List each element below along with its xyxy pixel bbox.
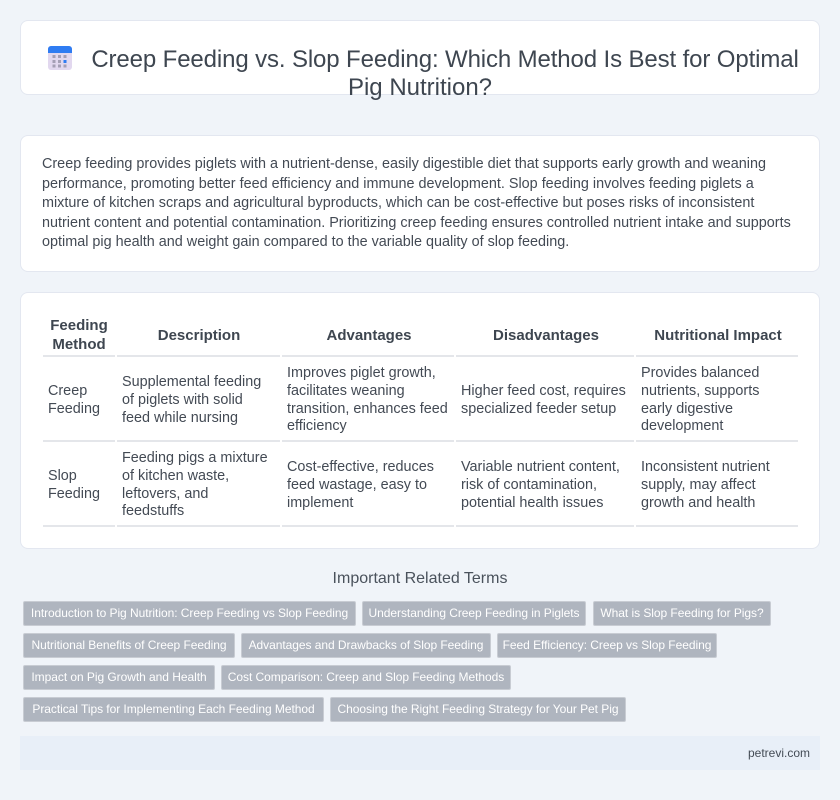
related term tags: Cost Comparison: Creep and Slop Feeding Methods — [228, 670, 504, 684]
text block: introduction: mixture of kitchen scraps and agricultural byproducts, which can be cost-effective but poses risks of inconsistent — [42, 195, 754, 211]
panel: comparison table — [20, 292, 820, 549]
related term tags: Choosing the Right Feeding Strategy for Your Pet Pig — [338, 702, 618, 716]
table row: slop feeding: leftovers, and — [122, 486, 208, 502]
table header row — [50, 317, 782, 353]
table row: creep feeding: Creep — [48, 383, 87, 399]
text block: introduction: optimal pig health and weight gain compared to the variable quality of slop feeding. — [42, 234, 569, 250]
table row: slop feeding: Variable nutrient content, — [461, 459, 620, 475]
text block: introduction — [42, 156, 791, 250]
table row: creep feeding: Higher feed cost, requires — [461, 383, 626, 399]
table row: creep feeding: Feeding — [48, 401, 100, 417]
table header row: Description — [158, 327, 240, 344]
related term tags — [23, 601, 771, 722]
related term tags: What is Slop Feeding for Pigs? — [600, 606, 764, 620]
table row: slop feeding: Inconsistent nutrient — [641, 459, 770, 475]
table row: slop feeding: Slop — [48, 468, 77, 484]
related term tags: Feed Efficiency: Creep vs Slop Feeding — [503, 638, 711, 652]
table row: slop feeding: feedstuffs — [122, 503, 184, 519]
related term tags: Understanding Creep Feeding in Piglets — [369, 606, 579, 620]
table row: slop feeding: potential health issues — [461, 495, 603, 511]
text block: introduction: Creep feeding provides piglets with a nutrient-dense, easily digestible diet that supports early growth and weaning — [42, 156, 766, 172]
related term tags: Nutritional Benefits of Creep Feeding — [32, 638, 226, 652]
table row: slop feeding: Feeding — [48, 486, 100, 502]
table row: creep feeding: early digestive — [641, 401, 733, 417]
table header row: Method — [52, 336, 106, 353]
table row: creep feeding: Provides balanced — [641, 365, 759, 381]
table row: slop feeding: risk of contamination, — [461, 477, 597, 493]
panel: introduction text — [20, 135, 820, 272]
table header row: Nutritional Impact — [654, 327, 782, 344]
footer bar — [20, 736, 820, 770]
table row: creep feeding: development — [641, 418, 723, 434]
related term tags: Advantages and Drawbacks of Slop Feeding — [249, 638, 483, 652]
title: Creep Feeding vs. Slop Feeding: Which Method Is Best for Optimal — [91, 46, 799, 73]
table row: creep feeding: transition, enhances feed — [287, 401, 448, 417]
table row: slop feeding: supply, may affect — [641, 477, 756, 493]
table row: creep feeding: of piglets with solid — [122, 392, 243, 408]
table header row: Disadvantages — [493, 327, 599, 344]
table row: creep feeding: Supplemental feeding — [122, 374, 261, 390]
table row: slop feeding — [48, 450, 770, 519]
text block: introduction: performance, promoting better feed efficiency and immune development. Slop feeding involves feeding piglets a — [42, 176, 754, 192]
title — [91, 46, 799, 101]
title: Pig Nutrition? — [348, 74, 492, 101]
related term tags: Introduction to Pig Nutrition: Creep Feeding vs Slop Feeding — [31, 606, 348, 620]
icon: calendar — [48, 46, 72, 70]
table row: creep feeding: feed while nursing — [122, 410, 238, 426]
table row: creep feeding: efficiency — [287, 418, 347, 434]
table row: slop feeding: implement — [287, 495, 353, 511]
table header row: Feeding — [50, 317, 108, 334]
table row: slop feeding: Cost-effective, reduces — [287, 459, 434, 475]
text block: introduction: nutrient content and potential contamination. Prioritizing creep feeding ensures controlled nutrient intake and supports — [42, 214, 791, 230]
table row: creep feeding: Improves piglet growth, — [287, 365, 436, 381]
table row: creep feeding: facilitates weaning — [287, 383, 405, 399]
heading: important related terms: Important Related Terms — [333, 570, 507, 587]
footer source text: petrevi.com — [748, 746, 810, 760]
table row: slop feeding: growth and health — [641, 495, 755, 511]
table row: slop feeding: feed wastage, easy to — [287, 477, 427, 493]
table row: creep feeding: specialized feeder setup — [461, 401, 616, 417]
table row: slop feeding: of kitchen waste, — [122, 468, 229, 484]
table row: creep feeding: nutrients, supports — [641, 383, 759, 399]
table row: creep feeding — [48, 365, 759, 434]
table header row: Advantages — [326, 327, 412, 344]
related term tags: Practical Tips for Implementing Each Feeding Method — [32, 702, 315, 716]
table row: slop feeding: Feeding pigs a mixture — [122, 450, 268, 466]
related term tags: Impact on Pig Growth and Health — [31, 670, 207, 684]
panel: title header — [20, 20, 820, 95]
